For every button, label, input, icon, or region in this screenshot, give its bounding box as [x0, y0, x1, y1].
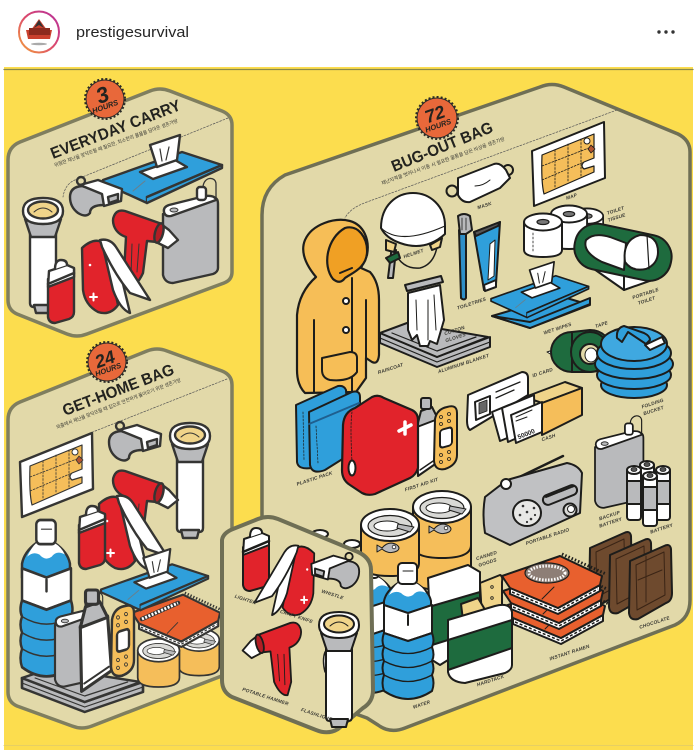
- item: batteries: [627, 461, 674, 536]
- icon: flashlight: [170, 423, 210, 538]
- item: folding bucket: [595, 326, 673, 417]
- badge: 72 hours: 72: [422, 102, 448, 127]
- carton green band: [432, 592, 480, 645]
- item: water bottle: WATER: [412, 699, 431, 711]
- tool: craft knife: [254, 545, 314, 615]
- item: mask: [446, 164, 513, 211]
- item: raincoat: [297, 220, 405, 393]
- item: backup battery: BACKUP: [598, 510, 622, 522]
- icon: water bottle: [20, 520, 73, 676]
- item: portable radio: [484, 456, 582, 547]
- icon: whistle: [70, 177, 122, 216]
- icon: flashlight: [23, 198, 63, 313]
- item: wet wipes: [491, 262, 590, 336]
- item: toilet tissue: TISSUE: [607, 212, 627, 224]
- item: map: MAP: [565, 192, 579, 202]
- username: prestigesurvival: [76, 25, 189, 41]
- icon: bandage: [111, 605, 134, 676]
- item: helmet: HELMET: [403, 248, 425, 260]
- item: cotton gloves: COTTON: [444, 325, 466, 337]
- tool labels: CRAFT KNIFE: [279, 609, 314, 625]
- panel: everyday carry: [8, 80, 232, 336]
- item: instant ramen: [502, 554, 609, 662]
- icon: lighter: [79, 506, 105, 569]
- item: aluminum blanket: [380, 323, 491, 375]
- item: toilet tissue: [524, 205, 627, 257]
- subheading: 위험한 재난을 맞닥뜨릴 때 필요한, 최소한의 물품을 담아둔 생존가방: [53, 117, 179, 169]
- item: portable toilet: [570, 220, 676, 307]
- icon: hammer: [113, 211, 178, 287]
- item: mask: MASK: [477, 201, 493, 211]
- badge: 72 hours: [416, 98, 458, 138]
- item: backup battery: BATTERY: [599, 516, 623, 530]
- heading: bug-out bag: BUG-OUT BAG: [389, 119, 496, 176]
- item: hardtack: HARDTACK: [476, 674, 505, 688]
- icon: lighter: [48, 260, 74, 323]
- item: backup battery: [595, 416, 643, 530]
- icon: craft knife: [82, 240, 150, 313]
- item: cotton gloves: [405, 276, 467, 346]
- item: batteries: BATTERY: [650, 522, 674, 536]
- tool: lighter: [243, 528, 269, 591]
- subheading: 재난지역을 벗어나서 이동 시 필요한 물품을 담은 비상용 생존가방: [380, 135, 506, 187]
- item: canned goods: GOODS: [478, 557, 498, 569]
- badge: 3 hours: [86, 80, 124, 118]
- icon: tube: [80, 590, 112, 691]
- avatar: [19, 12, 59, 52]
- item: portable radio: PORTABLE RADIO: [525, 527, 570, 547]
- item: portable toilet: TOILET: [637, 295, 657, 307]
- icon: power bank: [55, 593, 104, 687]
- icon: hammer: [113, 471, 178, 547]
- item: aluminum blanket: ALUMINUM BLANKET: [436, 353, 491, 375]
- item: instant ramen: INSTANT RAMEN: [549, 644, 591, 662]
- item: plastic pack: PLASTIC PACK: [296, 470, 334, 488]
- badge: 24 hours: HOURS: [94, 361, 122, 379]
- noodle squiggle: [142, 603, 178, 619]
- item: hardtack: [448, 575, 512, 688]
- badge: 3 hours: 3: [92, 81, 112, 109]
- tool labels: LIGHTER: [234, 594, 257, 606]
- icon: craft knife: [99, 496, 167, 569]
- tool labels: [234, 589, 345, 723]
- icon: blanket: [22, 668, 143, 712]
- item: raincoat: RAINCOAT: [377, 362, 405, 376]
- item: helmet: [381, 193, 445, 278]
- icon: map: [20, 433, 93, 517]
- item: wet wipes: WET WIPES: [543, 321, 573, 336]
- icon: instant ramen: [132, 593, 224, 647]
- item: toiletries: [456, 214, 500, 312]
- item: toiletries: TOILETRIES: [456, 296, 488, 312]
- item: map: [532, 122, 605, 206]
- badge: 3 hours: HOURS: [91, 98, 119, 116]
- item: id card: ID CARD: [532, 367, 554, 379]
- icon: whistle: [109, 422, 161, 460]
- back bottle and peeking caps: [312, 530, 396, 693]
- item: tape: [547, 320, 612, 372]
- tool: whistle: [311, 553, 359, 588]
- item: id card: [467, 367, 554, 430]
- item: tape: TAPE: [594, 320, 609, 330]
- badge: 72 hours: HOURS: [424, 117, 452, 135]
- item: carton: [428, 565, 480, 665]
- badge: 24 hours: 24: [91, 347, 118, 373]
- item: folding bucket: BUCKET: [643, 405, 666, 417]
- subheading: 외출에서 재난을 맞닥뜨릴 때 집으로 안전하게 돌아오기 위한 생존가방: [55, 377, 182, 431]
- item: toilet tissue: TOILET: [606, 205, 626, 217]
- item: chocolate: CHOCOLATE: [639, 615, 671, 631]
- badge: 24 hours: [88, 342, 126, 382]
- tool labels: POTABLE HAMMER: [241, 687, 290, 707]
- heading: everyday carry: EVERYDAY CARRY: [48, 97, 184, 163]
- item: portable toilet: PORTABLE: [632, 287, 660, 301]
- tool: hammer: [243, 623, 301, 695]
- item: folding bucket: FOLDING: [641, 398, 665, 410]
- item: canned goods: CANNED: [475, 550, 498, 562]
- item: first aid kit: FIRST AID KIT: [404, 477, 440, 493]
- icon: power bank: [163, 178, 218, 283]
- tool labels: WHISTLE: [320, 589, 345, 602]
- panel: bug-out bag: [262, 84, 690, 730]
- icon: canned goods: [138, 629, 219, 687]
- item: cash: CASH: [541, 433, 557, 443]
- tool labels: FLASHLIGHT: [300, 707, 333, 723]
- item: plastic pack: [296, 386, 360, 488]
- panel: small everyday tools: [222, 517, 373, 732]
- more menu: [657, 30, 675, 34]
- item: cash: [492, 382, 582, 443]
- icon: wet wipes: [101, 549, 208, 610]
- panel: get-home bag: [8, 342, 232, 728]
- item: water bottle: [382, 563, 434, 711]
- post header: [19, 12, 675, 52]
- tool: flashlight: [319, 612, 359, 727]
- item: canned goods: [361, 491, 498, 590]
- item: first aid kit: [342, 396, 457, 495]
- item: cotton gloves: GLOVES: [445, 332, 467, 344]
- heading: get-home bag: GET-HOME BAG: [60, 362, 177, 420]
- item: chocolate: [589, 532, 672, 631]
- item: cash: 50000: [517, 428, 536, 441]
- icon: wet wipes: [103, 135, 222, 203]
